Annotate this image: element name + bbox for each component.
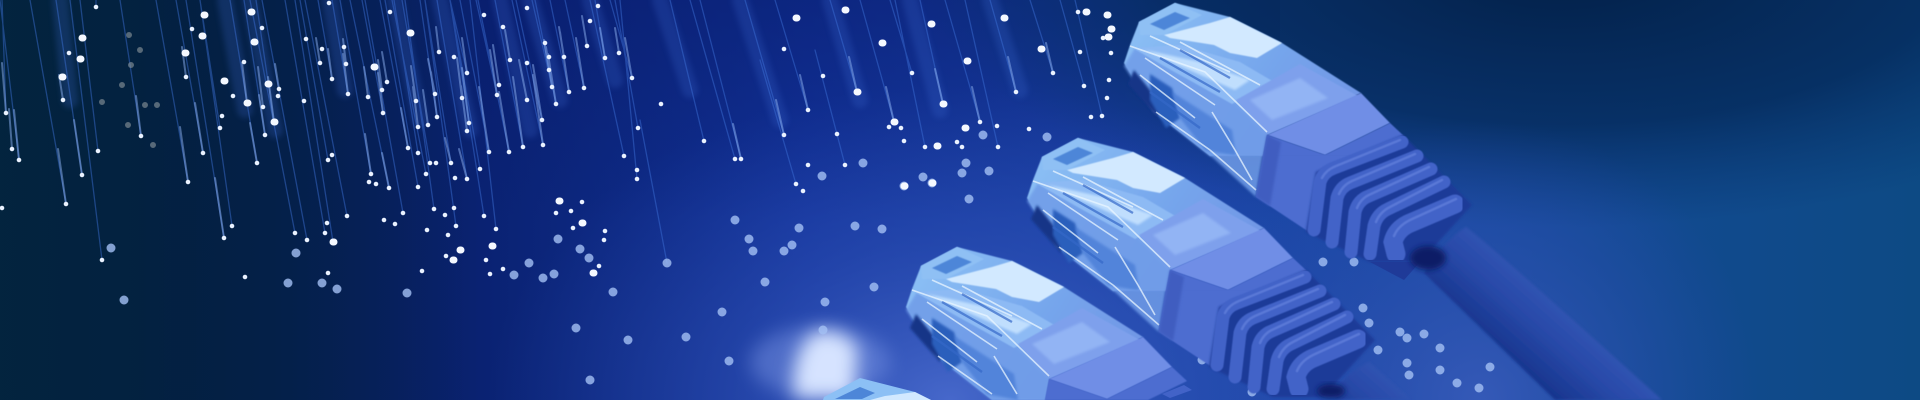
plug body, lower <box>906 247 1187 400</box>
plug body, middle <box>1027 138 1308 291</box>
plug body, top <box>1124 3 1405 156</box>
cable shadow, middle <box>1317 384 1345 398</box>
light flare on the table <box>750 326 890 398</box>
plug ribs, top <box>1210 135 1472 262</box>
small bright points <box>2 3 1111 277</box>
fibre strands <box>0 0 1102 263</box>
plug ribs, middle <box>1113 270 1375 397</box>
network cable plug, bottom partial <box>823 378 931 400</box>
shadow under last rib, top <box>1370 262 1420 280</box>
faint wide fibre glow <box>60 0 1020 130</box>
network cable plug, lower <box>906 247 1192 400</box>
bright fibre tips <box>2 16 1053 238</box>
large bright points <box>62 10 1112 273</box>
left out of focus ghost points <box>102 35 157 145</box>
cable, top plug <box>1424 227 1662 400</box>
light points on fibre tips <box>2 3 1490 392</box>
cable, middle plug <box>1335 362 1410 399</box>
cable shadow, top <box>1410 246 1446 270</box>
soft halo points <box>111 135 1490 392</box>
network cable plug, middle <box>1027 138 1410 399</box>
network cable plug, top <box>1124 3 1662 400</box>
long fibres <box>0 0 1102 263</box>
rib fragment, lower <box>1162 385 1192 398</box>
